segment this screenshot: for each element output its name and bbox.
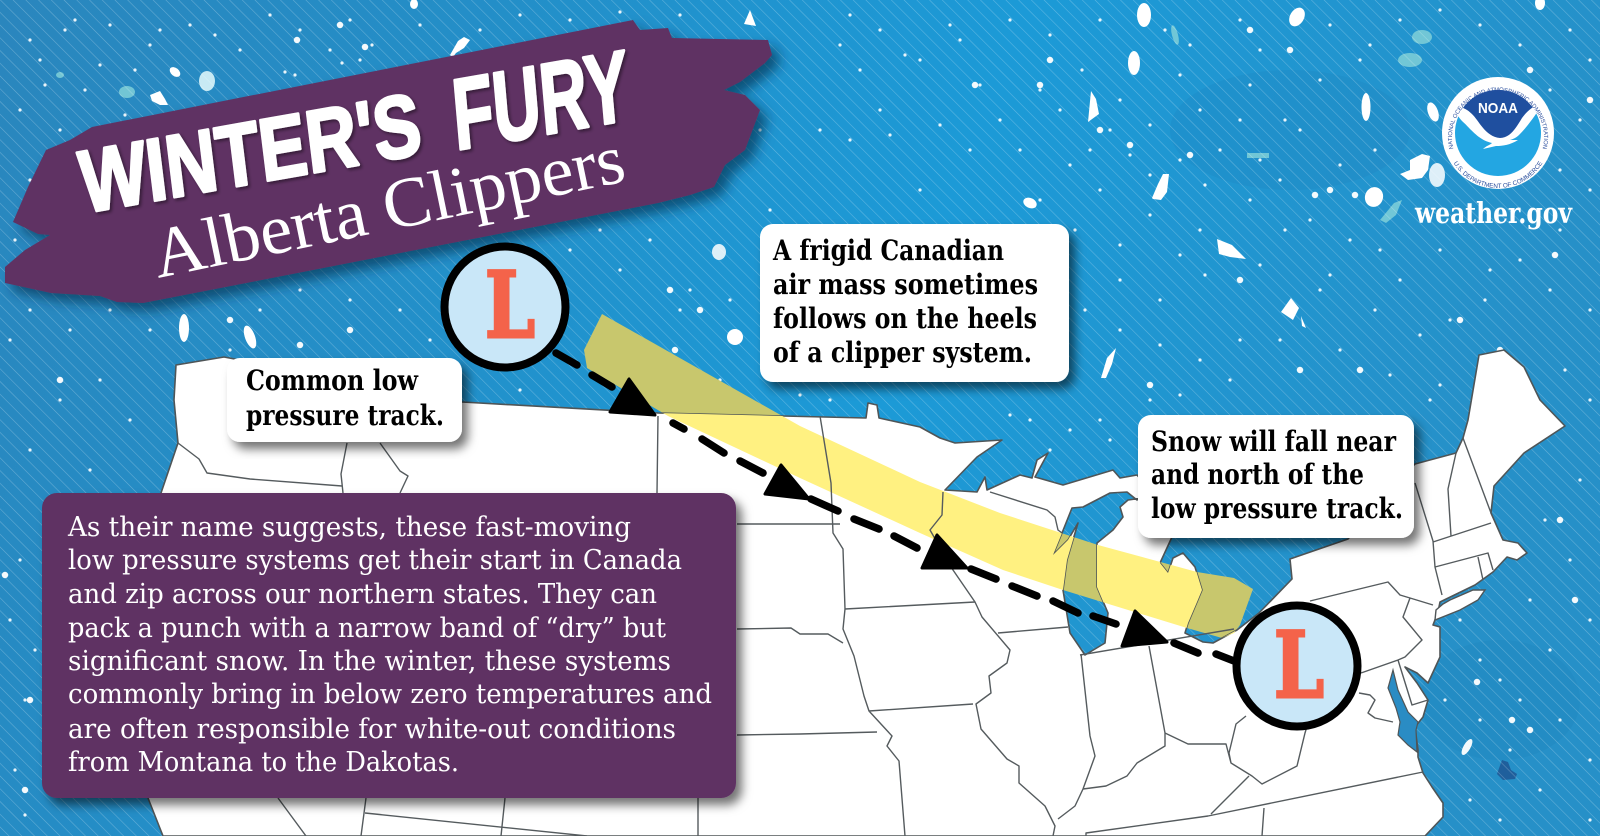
callout: frigid Canadian air mass: follows on the heels [773, 302, 1037, 335]
subtitle: Alberta Clippers: Alberta Clippers [145, 120, 631, 294]
callout: frigid Canadian air mass: air mass sometimes [773, 268, 1038, 301]
callout: snow will fall [1138, 415, 1414, 538]
icon: NOAA logo: U.S. DEPARTMENT OF COMMERCE [1454, 160, 1542, 188]
panel: description text: and zip across our northern states. They can [68, 578, 657, 610]
panel: description text: low pressure systems get their start in Canada [68, 544, 682, 576]
low pressure marker: start: L [485, 253, 535, 359]
panel: description text: As their name suggests, these fast-moving [67, 511, 631, 543]
title: Winter's Fury: WINTER'S [74, 74, 426, 232]
map: Long Island [1435, 590, 1485, 620]
low pressure marker: end: L [1274, 613, 1324, 719]
title: Winter's Fury: FURY [448, 29, 633, 172]
callout: frigid Canadian air mass: of a clipper system. [773, 336, 1032, 369]
callout: common low pressure track [227, 358, 462, 442]
triangle marker 4 [1122, 611, 1167, 646]
callout: common low pressure track: pressure track. [246, 399, 444, 432]
low pressure marker: start [444, 246, 566, 368]
icon: NOAA logo: NATIONAL OCEANIC AND ATMOSPHERIC ADMINISTRATION [1448, 87, 1548, 150]
triangle marker 3 [922, 535, 967, 568]
panel: description text [42, 493, 736, 798]
callout: snow will fall: low pressure track. [1151, 492, 1403, 525]
panel: description text: are often responsible for white-out conditions [68, 713, 676, 745]
triangle marker 2 [765, 465, 809, 499]
title banner: purple brush stroke [5, 20, 772, 303]
title: Winter's Fury [74, 29, 633, 232]
map: United States outline [130, 350, 1565, 836]
icon: NOAA logo [1442, 77, 1554, 189]
map: Chesapeake Bay [1388, 670, 1418, 752]
callout: frigid Canadian air mass: A frigid Canadian [772, 234, 1004, 267]
panel: description text: from Montana to the Dakotas. [68, 746, 459, 778]
band: air mass under map (olive over water) [584, 314, 1253, 638]
snow flecks: large [150, 0, 1545, 757]
panel: description text: pack a punch with a narrow band of “dry” but [68, 612, 666, 644]
triangle marker 1 [610, 379, 655, 415]
low pressure track: dashed line with triangles [556, 353, 1234, 661]
callout: frigid Canadian air mass [760, 224, 1069, 382]
teal flecks [56, 25, 1432, 223]
dark ocean blot [1497, 760, 1517, 780]
callout: snow will fall: and north of the [1151, 458, 1364, 491]
panel: description text: significant snow. In the winter, these systems [68, 645, 671, 677]
low pressure marker: end [1236, 606, 1358, 726]
icon: NOAA logo: NOAA [1478, 100, 1518, 117]
callout: snow will fall: Snow will fall near [1151, 425, 1397, 458]
band: snowfall swath over land (yellow) [663, 413, 1236, 638]
panel: description text: commonly bring in below zero temperatures and [68, 678, 712, 710]
callout: common low pressure track: Common low [246, 364, 419, 397]
map: state lines [178, 416, 1493, 836]
